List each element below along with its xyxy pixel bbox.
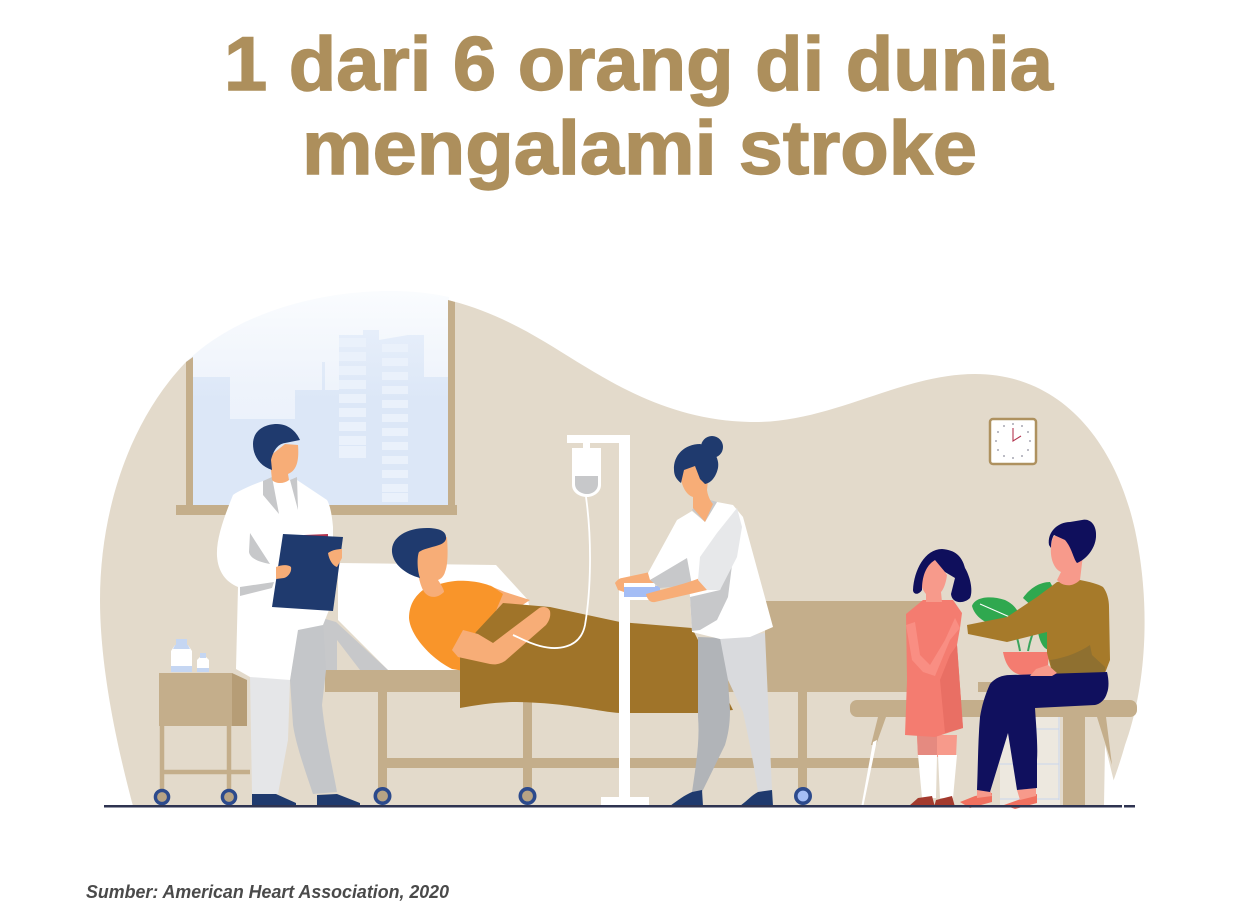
mother sweater — [967, 580, 1110, 676]
nurse collar — [692, 500, 717, 522]
nurse near forearm — [646, 578, 707, 602]
leaves — [972, 582, 1060, 650]
mother trousers — [977, 672, 1108, 792]
IV bag — [572, 443, 601, 497]
nurse sleeve — [698, 508, 742, 590]
nurse near leg — [720, 633, 772, 792]
girl — [905, 549, 971, 807]
doctor coat shadow — [240, 477, 298, 596]
girl socks — [918, 755, 957, 798]
IV stand — [513, 435, 649, 806]
patient hair — [392, 528, 446, 578]
girl legs — [917, 735, 957, 757]
nurse shoes — [670, 790, 773, 806]
background blob — [100, 293, 1145, 806]
table wheels — [155, 790, 236, 804]
nurse far forearm — [615, 572, 656, 592]
source note: Sumber: American Heart Association, 2020 — [86, 881, 450, 902]
doctor shoes — [252, 794, 360, 807]
girl face and neck — [920, 558, 947, 602]
floor line — [104, 805, 1135, 808]
clipboard — [304, 534, 328, 537]
bench legs — [871, 682, 1112, 806]
wall clock — [990, 419, 1036, 464]
doctor hair — [253, 424, 300, 470]
patient far arm — [490, 586, 530, 610]
mother hair — [1049, 520, 1096, 563]
backrest — [338, 563, 530, 670]
nurse hair — [674, 436, 723, 484]
mother — [960, 520, 1110, 809]
bench — [850, 682, 1137, 808]
nurse neck and face — [680, 462, 713, 522]
bed frame — [382, 690, 802, 790]
doctor far leg — [290, 620, 337, 794]
hospital bed — [322, 563, 925, 803]
doctor hands — [276, 549, 342, 579]
mother shoes — [960, 793, 1037, 809]
bench seat — [850, 700, 1137, 717]
doctor coat — [217, 480, 333, 680]
potted plant — [972, 582, 1060, 675]
pot — [1003, 652, 1049, 675]
footboard — [765, 601, 925, 692]
bottles — [171, 639, 209, 672]
window — [176, 291, 457, 515]
mother hand — [1030, 665, 1057, 676]
doctor neck and face — [270, 444, 298, 483]
patient shirt — [409, 581, 503, 672]
window glass — [186, 291, 449, 505]
patient — [392, 528, 733, 713]
nurse shirt — [648, 502, 773, 639]
IV tube — [513, 497, 590, 648]
nurse — [615, 436, 773, 806]
bedside table with bottles — [155, 639, 250, 804]
patient neck and face — [417, 537, 448, 597]
girl arms — [906, 618, 960, 676]
girl shoes — [909, 796, 955, 807]
window frame — [176, 300, 457, 515]
title: mengalami stroke — [302, 106, 977, 191]
bed wheels — [375, 789, 810, 803]
girl dress — [905, 600, 963, 737]
patient arm — [452, 607, 550, 664]
doctor near leg — [250, 675, 290, 794]
doctor — [217, 424, 360, 807]
drawer unit — [1000, 717, 1060, 806]
city skyline — [193, 330, 449, 505]
nurse shirt shade — [650, 557, 733, 631]
title: 1 dari 6 orang di dunia — [224, 22, 1054, 107]
tablet — [624, 586, 660, 597]
mattress base — [325, 670, 790, 692]
nurse far leg — [692, 637, 730, 792]
IV pole — [567, 435, 649, 806]
mother neck and face — [1051, 530, 1083, 585]
blanket — [460, 603, 733, 713]
girl hair — [913, 549, 971, 602]
table — [159, 673, 232, 726]
title — [224, 22, 1054, 191]
